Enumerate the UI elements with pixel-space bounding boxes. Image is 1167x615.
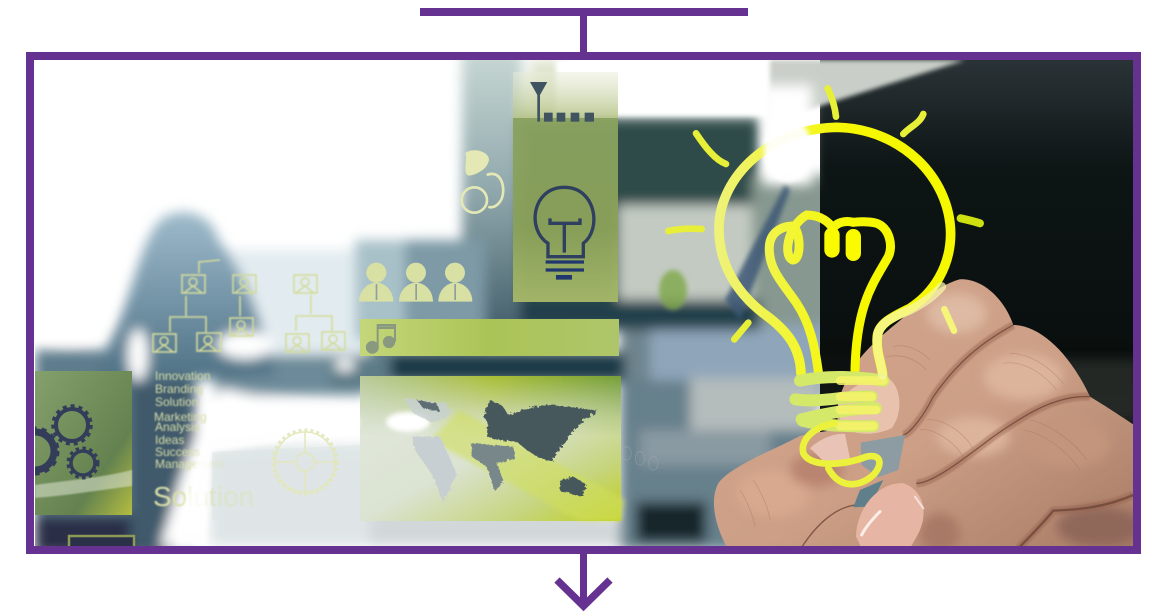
icon: swirl doodle xyxy=(462,151,503,213)
word list: Ideas xyxy=(155,433,184,447)
panel: music bar xyxy=(360,319,619,356)
hand silhouette xyxy=(707,273,1143,553)
word list: Branding xyxy=(155,382,203,396)
hand holding pen xyxy=(707,273,1143,553)
top connector bar xyxy=(420,8,748,53)
filament xyxy=(769,215,891,372)
word list: Analysis xyxy=(155,420,200,434)
white glare over words xyxy=(176,443,253,546)
blurred office background xyxy=(30,50,1140,555)
thumb nail xyxy=(810,434,850,460)
word list: Innovation xyxy=(155,369,210,383)
index nail xyxy=(837,378,899,434)
icon: sun gear on desk xyxy=(273,430,337,494)
word list: Marketing xyxy=(154,410,207,424)
word list: Success xyxy=(155,445,200,459)
knuckle shading xyxy=(740,346,1087,527)
screw threads xyxy=(795,377,883,426)
down arrow xyxy=(557,553,610,606)
photo panel: office with hand drawing a light bulb xyxy=(13,50,1143,556)
icon: music note xyxy=(366,325,395,354)
word list: Solution xyxy=(155,395,198,409)
blurred keyboard right of map xyxy=(622,447,658,470)
word list: Management xyxy=(155,457,226,471)
threads over finger xyxy=(840,381,883,426)
icon: outline bulb xyxy=(535,187,594,277)
rays xyxy=(668,88,980,339)
glare over bulb xyxy=(764,118,812,182)
outline tint over hand xyxy=(877,287,942,375)
photo frame xyxy=(30,56,1137,550)
word list: Solution xyxy=(153,481,254,512)
bulb outline xyxy=(719,127,951,375)
small outlined box xyxy=(68,534,136,546)
org chart xyxy=(153,260,345,352)
icon: signal bars xyxy=(530,82,594,122)
icon: three people xyxy=(359,263,472,302)
keyboard highlight xyxy=(430,410,625,521)
lower nail xyxy=(856,483,924,548)
icon: drawn yellow light bulb xyxy=(668,88,980,484)
icon: gears xyxy=(35,404,100,480)
map: continents xyxy=(403,398,598,503)
panel: gears xyxy=(35,371,133,515)
pen xyxy=(861,435,905,477)
panel: bulb icon xyxy=(513,72,618,302)
word list xyxy=(153,369,254,512)
panel: world map xyxy=(331,376,625,521)
finger creases xyxy=(903,325,1133,548)
base loop xyxy=(803,423,879,484)
